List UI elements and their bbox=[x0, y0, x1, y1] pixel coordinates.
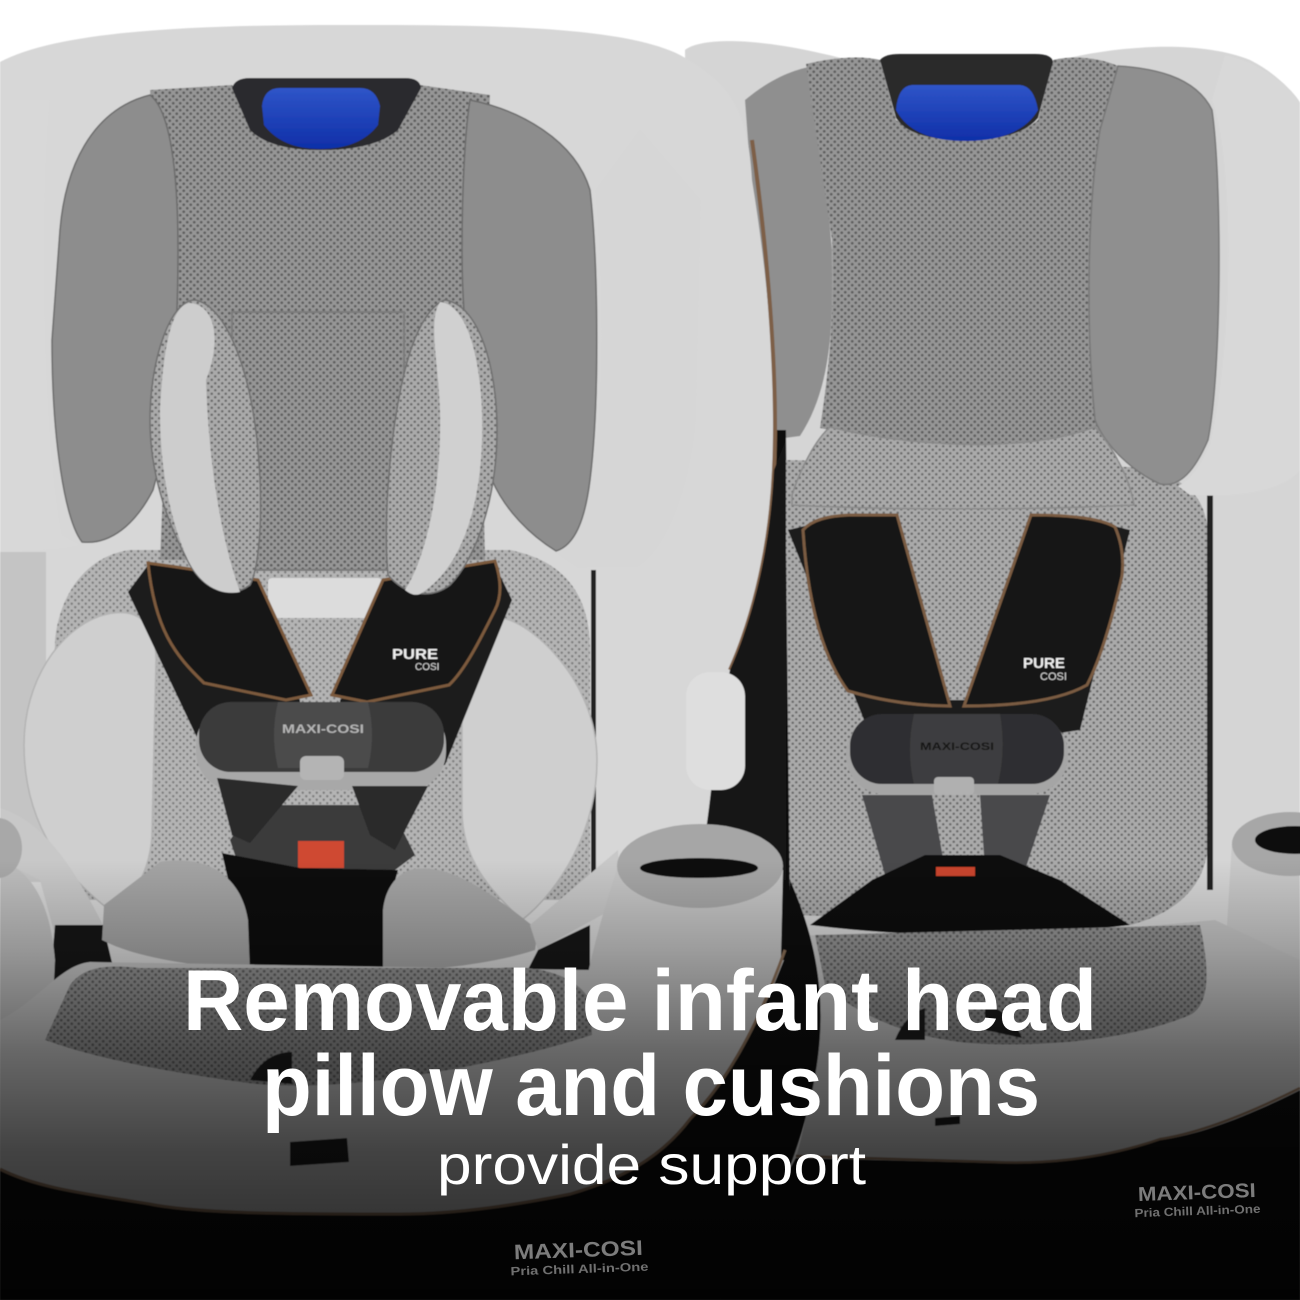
brand mark left seat bbox=[509, 1237, 649, 1278]
left seat headrest handle bbox=[232, 78, 421, 150]
left strap bbox=[862, 795, 945, 875]
brand mark right seat bbox=[1133, 1180, 1261, 1220]
left pillow mesh bbox=[150, 300, 261, 592]
black gap between seat bases bbox=[690, 880, 821, 1300]
black base bbox=[720, 1090, 1300, 1300]
clip body bbox=[850, 714, 1064, 784]
clip centre panel bbox=[910, 714, 1003, 784]
left strap bbox=[217, 778, 298, 843]
cup rim bbox=[1232, 812, 1300, 876]
base piping bbox=[0, 950, 785, 1214]
left outer strap bbox=[128, 565, 300, 770]
left seat right bolster bbox=[462, 100, 597, 551]
clip body bbox=[199, 702, 444, 772]
buckle housing bbox=[230, 805, 415, 870]
black gap left bbox=[50, 925, 115, 985]
infant head pillow bbox=[150, 300, 497, 595]
seat mesh bbox=[45, 967, 592, 1086]
right strap bbox=[352, 786, 428, 850]
left seat harness bbox=[128, 561, 512, 770]
clip lip bbox=[196, 706, 446, 790]
right seat lower straps and buckle bbox=[810, 795, 1130, 935]
harness adjust clip bbox=[686, 672, 745, 790]
dark strip between seats bbox=[690, 430, 821, 1300]
car seat: left (front) bbox=[0, 25, 821, 1300]
side trim bbox=[0, 552, 46, 882]
pad logo sub: COSI bbox=[415, 662, 439, 673]
cup hole bbox=[640, 858, 758, 878]
right seat harness pads bbox=[788, 515, 1130, 760]
right seat headrest handle bbox=[880, 54, 1053, 140]
mesh notch bbox=[250, 1052, 292, 1084]
left seat lower straps and buckle bbox=[217, 778, 428, 975]
left harness pad bbox=[148, 563, 311, 700]
right seat cup holder bbox=[1225, 812, 1300, 960]
seat mesh notch left bbox=[895, 1008, 925, 1040]
seat mesh bbox=[815, 925, 1207, 1045]
right seat lower back mesh bbox=[785, 460, 1208, 925]
left seat right wing bottom bbox=[556, 130, 700, 567]
clip tab bbox=[934, 777, 974, 795]
black base bbox=[0, 1120, 720, 1300]
red release button bbox=[936, 867, 975, 876]
leg pad right bbox=[383, 868, 538, 972]
clip tab bbox=[300, 756, 344, 780]
left seat cup holder bbox=[575, 824, 783, 1060]
right seat chest clip bbox=[846, 714, 1068, 795]
left seat blue adjuster bbox=[262, 88, 380, 149]
clip logo: MAXI-COSI bbox=[920, 741, 994, 753]
model name: Pria Chill All-in-One bbox=[510, 1260, 649, 1278]
left seat light shell bbox=[0, 25, 774, 1100]
light seat edge bbox=[0, 960, 785, 1215]
outer harness strap bbox=[788, 520, 1130, 760]
subheading: provide support bbox=[437, 1133, 866, 1196]
dark gap beside back bbox=[591, 570, 596, 900]
right seat cushion bbox=[720, 920, 1300, 1300]
left pillow light face bbox=[160, 303, 240, 593]
cup body bbox=[1225, 840, 1300, 960]
left seat dark strip bbox=[706, 440, 786, 880]
side cushion right bbox=[462, 618, 597, 920]
left seat lower back mesh bbox=[50, 550, 590, 900]
brand name: MAXI-COSI bbox=[1137, 1180, 1256, 1206]
right seat right bolster bbox=[1089, 66, 1219, 485]
right outer strap bbox=[340, 565, 512, 770]
pad logo: PURE bbox=[392, 646, 438, 663]
cup body bbox=[575, 860, 783, 1060]
headline line 2: pillow and cushions bbox=[262, 1038, 1040, 1134]
right strap bbox=[980, 795, 1050, 870]
headline line 1: Removable infant head bbox=[183, 953, 1097, 1049]
model name: Pria Chill All-in-One bbox=[1134, 1202, 1261, 1220]
right seat light wing bbox=[1178, 55, 1300, 496]
right seat light shell bbox=[685, 41, 1300, 1100]
left seat chest clip bbox=[196, 702, 446, 790]
left body bbox=[0, 860, 55, 1080]
seat buckle slot bbox=[290, 1138, 349, 1166]
clip centre panel bbox=[274, 702, 372, 768]
left seat left wing bottom bbox=[0, 100, 80, 551]
right seat collar pad bbox=[792, 427, 1134, 509]
red release button bbox=[298, 841, 344, 868]
dark gap right bbox=[520, 925, 590, 1000]
light seat edge bbox=[796, 920, 1300, 1163]
left cup edge bbox=[0, 818, 22, 878]
base piping bbox=[796, 1088, 1300, 1162]
right seat pad logo sub: COSI bbox=[1040, 671, 1067, 683]
right seat left bolster bbox=[745, 66, 832, 440]
right armrest bbox=[530, 850, 620, 950]
right harness pad bbox=[332, 561, 500, 702]
left seat piping bbox=[730, 140, 775, 670]
cup hole bbox=[1255, 826, 1300, 854]
left armrest bbox=[0, 808, 103, 990]
car seat: right (rear) bbox=[685, 41, 1300, 1300]
seat buckle slot bbox=[935, 1116, 960, 1126]
left seat left bolster bbox=[52, 95, 178, 542]
headline bbox=[183, 953, 1097, 1134]
clip lip bbox=[846, 716, 1068, 794]
clip logo: MAXI-COSI bbox=[282, 722, 364, 736]
right pillow light face bbox=[405, 302, 482, 595]
right seat left harness pad bbox=[803, 515, 950, 706]
light patch below head panel bbox=[268, 578, 382, 618]
leg pad left bbox=[102, 860, 250, 972]
crotch pad bbox=[222, 853, 398, 975]
right seat centre mesh back bbox=[806, 57, 1118, 449]
bottom dark gradient overlay bbox=[0, 860, 1300, 1300]
right seat pad logo: PURE bbox=[1023, 655, 1065, 672]
seat mesh notch right bbox=[985, 1005, 1022, 1038]
cup rim bbox=[617, 824, 783, 908]
right seat blue adjuster bbox=[896, 85, 1038, 141]
right seat right harness pad bbox=[964, 515, 1123, 706]
left seat centre mesh back bbox=[150, 85, 490, 560]
left seat cushion bbox=[0, 880, 821, 1300]
right seat inner black shadow bbox=[1207, 490, 1213, 890]
brand name: MAXI-COSI bbox=[513, 1237, 643, 1264]
side cushion left bbox=[24, 613, 156, 912]
right pillow mesh bbox=[386, 300, 497, 594]
crotch area bbox=[810, 855, 1130, 935]
left seat lower head panel bbox=[232, 312, 404, 570]
